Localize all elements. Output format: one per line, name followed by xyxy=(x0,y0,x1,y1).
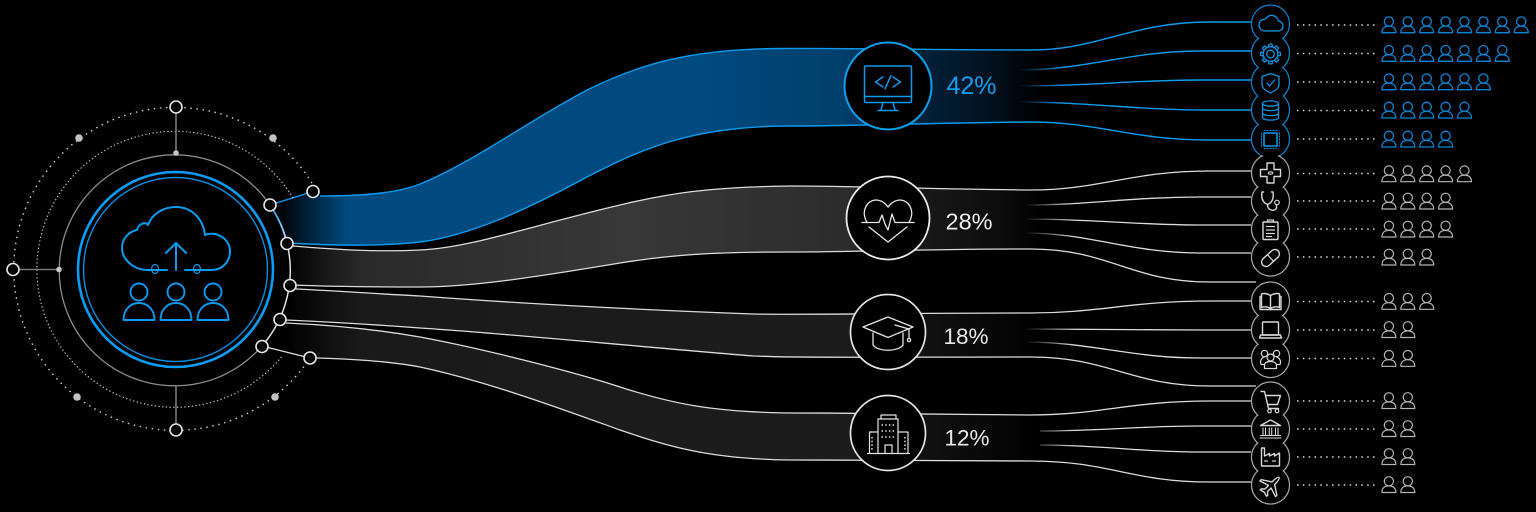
icon: bank xyxy=(1252,410,1290,448)
icon: open book xyxy=(1252,282,1290,320)
icon: shopping cart xyxy=(1252,382,1290,420)
dotted leader and people: bank row xyxy=(1297,421,1415,436)
icon: group of people xyxy=(1252,340,1290,378)
dotted leader and people: chip row xyxy=(1297,131,1453,147)
dotted leader and people: cart row xyxy=(1297,393,1415,408)
dotted leader and people: factory row xyxy=(1297,449,1415,464)
icon: factory xyxy=(1252,438,1290,476)
flow band: healthcare 28% xyxy=(293,171,1256,287)
flow band: education 18% xyxy=(286,289,1256,386)
flow band: business 12% xyxy=(262,323,1251,482)
dotted leader and people: cross row xyxy=(1297,166,1471,182)
subcategory circle outlines xyxy=(1252,5,1290,504)
category: education xyxy=(850,294,989,370)
category: business xyxy=(850,396,990,470)
dotted leader and people: pill row xyxy=(1297,249,1434,265)
central hub: cloud upload with people xyxy=(78,172,273,367)
dotted leader and people: gear row xyxy=(1297,46,1509,61)
category: healthcare xyxy=(846,176,993,260)
icon: clipboard xyxy=(1252,210,1290,248)
icon: airplane xyxy=(1252,467,1290,505)
flow band: technology 42% xyxy=(270,22,1251,245)
icon: graduation cap xyxy=(863,317,913,350)
value: 18%: 18% xyxy=(944,324,989,349)
dotted leader and people: shield row xyxy=(1297,74,1490,90)
dotted leader and people: airplane row xyxy=(1297,477,1415,492)
icon: monitor with code xyxy=(864,66,912,110)
central hub rings xyxy=(7,101,312,436)
icon: medical cross xyxy=(1252,154,1290,192)
dotted leader and people: laptop row xyxy=(1297,322,1415,338)
dotted leader and people: group row xyxy=(1297,350,1415,366)
icon: office building xyxy=(867,415,910,454)
icon: shield xyxy=(1252,64,1290,102)
icon: cloud upload xyxy=(122,207,230,274)
icon: stethoscope xyxy=(1252,182,1290,220)
dotted leader and people: book row xyxy=(1297,294,1434,309)
icon: pill xyxy=(1252,239,1290,277)
icon: laptop xyxy=(1252,311,1290,349)
value: 42%: 42% xyxy=(946,72,997,100)
icon: processor chip xyxy=(1252,120,1290,158)
icon: gear xyxy=(1252,35,1290,73)
value: 12%: 12% xyxy=(944,426,990,450)
icon: cloud xyxy=(1252,6,1290,44)
dotted leader and people: stethoscope row xyxy=(1297,193,1453,209)
dotted leader and people: cloud row xyxy=(1297,17,1528,33)
icon: database xyxy=(1252,92,1290,130)
icon: three people xyxy=(124,284,228,320)
dotted leader and people: clipboard row xyxy=(1297,221,1453,237)
connector nodes xyxy=(256,186,319,364)
value: 28%: 28% xyxy=(946,208,993,234)
icon: heart with pulse xyxy=(862,200,914,242)
category: technology xyxy=(844,42,997,130)
dotted leader and people: database row xyxy=(1297,102,1471,118)
